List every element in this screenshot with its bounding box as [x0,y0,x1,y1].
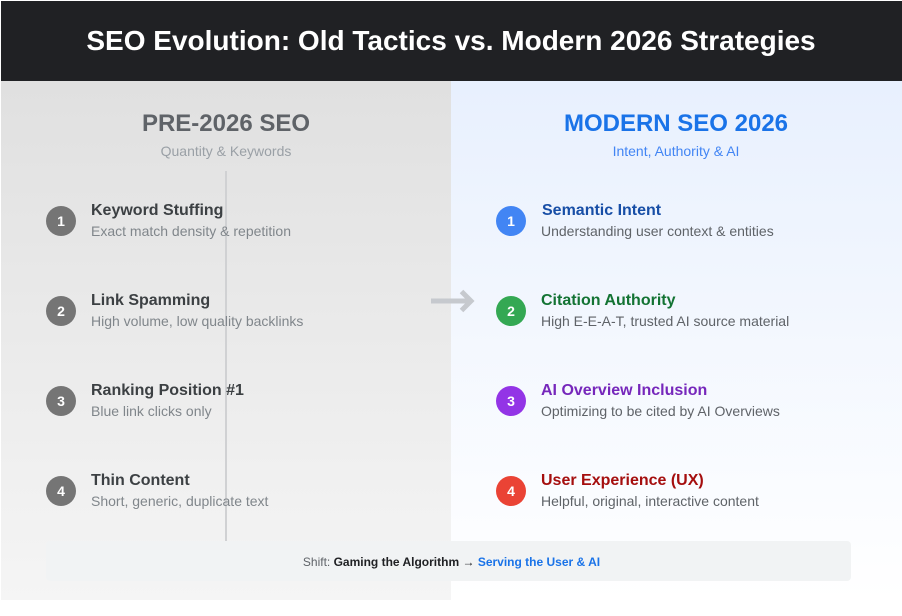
title banner [1,1,902,81]
badge 2 [496,296,526,326]
badge 3 [496,386,526,416]
badge 1 [46,206,76,236]
badge 3 [46,386,76,416]
badge 3: 3 [507,393,515,409]
badge 2: 2 [57,303,65,319]
badge 2: 2 [507,303,515,319]
item description: High E-E-A-T, trusted AI source material [541,313,789,329]
center divider line [225,171,227,541]
item description: Understanding user context & entities [541,223,774,239]
right item 3 [496,382,780,419]
item description: Short, generic, duplicate text [91,493,268,509]
left item 2 [46,292,303,329]
arrow: old to modern [431,290,474,312]
badge 2 [46,296,76,326]
item description: Blue link clicks only [91,403,212,419]
title: SEO Evolution: Old Tactics vs. Modern 2026 Strategies [86,25,816,56]
shift summary bar [46,541,851,581]
badge 1: 1 [507,213,515,229]
badge 4 [46,476,76,506]
badge 4: 4 [507,483,515,499]
left item 4 [46,472,268,509]
item title: AI Overview Inclusion [541,382,707,399]
item title: Thin Content [91,472,190,489]
panel: modern SEO 2026 [451,81,902,600]
badge 4 [496,476,526,506]
left item 1 [46,202,291,239]
item title: Citation Authority [541,292,676,309]
badge 3: 3 [57,393,65,409]
left heading: PRE-2026 SEO [142,110,310,137]
left subheading: Quantity & Keywords [161,143,291,159]
item description: Optimizing to be cited by AI Overviews [541,403,780,419]
right item 1 [496,202,774,239]
right subheading: Intent, Authority & AI [613,143,739,159]
item title: Ranking Position #1 [91,382,244,399]
right heading: MODERN SEO 2026 [564,110,788,137]
badge 4: 4 [57,483,65,499]
item title: Keyword Stuffing [91,202,223,219]
summary text: Shift: Gaming the Algorithm → Serving the User & AI [303,555,600,569]
left item 3 [46,382,244,419]
panel: pre-2026 SEO [1,81,451,600]
right item 4 [496,472,759,509]
item description: High volume, low quality backlinks [91,313,303,329]
item description: Helpful, original, interactive content [541,493,759,509]
item description: Exact match density & repetition [91,223,291,239]
badge 1: 1 [57,213,65,229]
badge 1 [496,206,526,236]
right item 2 [496,292,789,329]
item title: Link Spamming [91,292,210,309]
item title: Semantic Intent [542,202,661,219]
item title: User Experience (UX) [541,472,704,489]
